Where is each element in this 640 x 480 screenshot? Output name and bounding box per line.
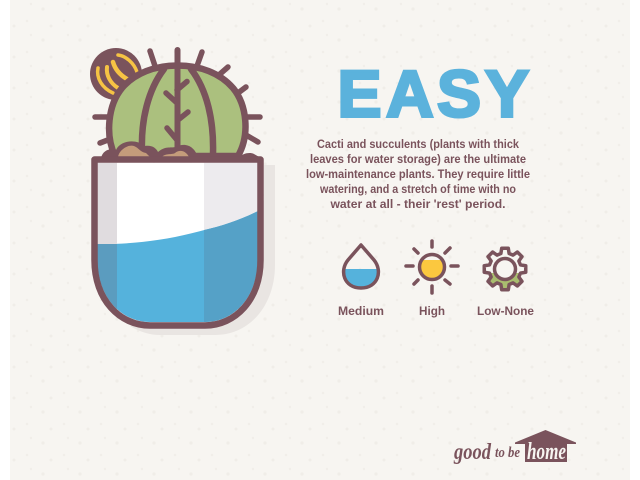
title: EASY [338, 56, 529, 130]
logo: good to be home [453, 430, 576, 465]
label: High: High [419, 304, 445, 318]
icon: gear, low-none [484, 248, 526, 290]
soil [101, 141, 261, 158]
cactus ribs and central spine [142, 50, 213, 154]
cactus spines [95, 51, 260, 143]
icon: water drop, medium [344, 245, 378, 288]
logo: good to be home: to be [495, 445, 520, 461]
pot body [94, 160, 260, 326]
description text: Cacti and succulents (plants with thick [317, 139, 520, 151]
cactus body [109, 66, 245, 156]
description text: low-maintenance plants. They require little [306, 169, 530, 181]
label: Low-None: Low-None [477, 304, 534, 318]
pot shadow [130, 165, 275, 335]
description text: water at all - their 'rest' period. [329, 199, 506, 211]
description text: leaves for water storage) are the ultimate [310, 154, 526, 166]
label: Medium: Medium [338, 304, 384, 318]
flower on cactus [90, 48, 142, 100]
icon: sun, high [406, 241, 458, 293]
logo: good to be home: good [453, 439, 491, 464]
illustration: cactus in pot [90, 48, 275, 335]
description text: watering, and a stretch of time with no [319, 184, 516, 196]
logo: good to be home: home [527, 439, 566, 465]
water in pot [97, 211, 258, 325]
description text [306, 139, 530, 211]
